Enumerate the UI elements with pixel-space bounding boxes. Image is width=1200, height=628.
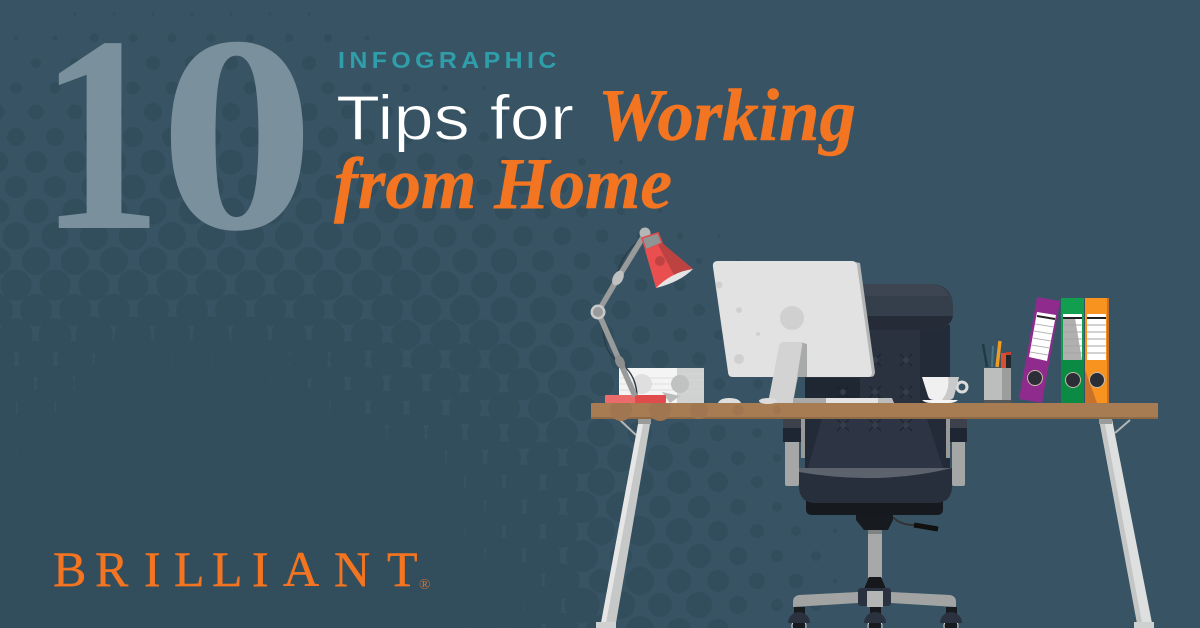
office chair: [783, 284, 967, 628]
title line 1: working: Working: [598, 75, 856, 157]
desk legs: [596, 419, 1154, 628]
stack of papers: [619, 368, 704, 403]
seat: [799, 468, 952, 515]
green binder: [1061, 298, 1084, 403]
armrests: [783, 418, 967, 486]
title line 2: from home: from Home: [334, 143, 672, 224]
chair column: [864, 530, 886, 589]
lamp wires: [603, 240, 640, 395]
desk lamp: [590, 228, 693, 403]
keyboard: [759, 398, 894, 404]
orange binder: [1085, 298, 1109, 403]
lamp arm: [598, 234, 645, 396]
coffee cup: [922, 377, 967, 403]
brilliant logo: ®: [419, 577, 430, 593]
back tufts: [837, 354, 912, 431]
lamp base: [605, 395, 666, 403]
lamp joints: [590, 228, 650, 370]
mouse: [718, 398, 741, 403]
desk top: [591, 399, 1158, 421]
monitor stand: [768, 342, 807, 403]
brilliant logo: BRILLIANT: [53, 541, 418, 597]
headrest: [800, 284, 953, 330]
chair base and casters: [788, 588, 962, 628]
purple binder: [1019, 297, 1060, 403]
right leg: [1099, 419, 1154, 628]
monitor back: [713, 261, 875, 377]
chair back: [805, 325, 950, 475]
gas lift lever: [856, 515, 938, 530]
big number 10: [39, 0, 315, 290]
lamp shade: [642, 233, 693, 288]
pen holder: [983, 341, 1011, 403]
left leg: [596, 419, 651, 628]
computer monitor: [713, 261, 875, 403]
title line 1: tips for: Tips for: [336, 84, 574, 154]
label: infographic: INFOGRAPHIC: [338, 48, 556, 74]
